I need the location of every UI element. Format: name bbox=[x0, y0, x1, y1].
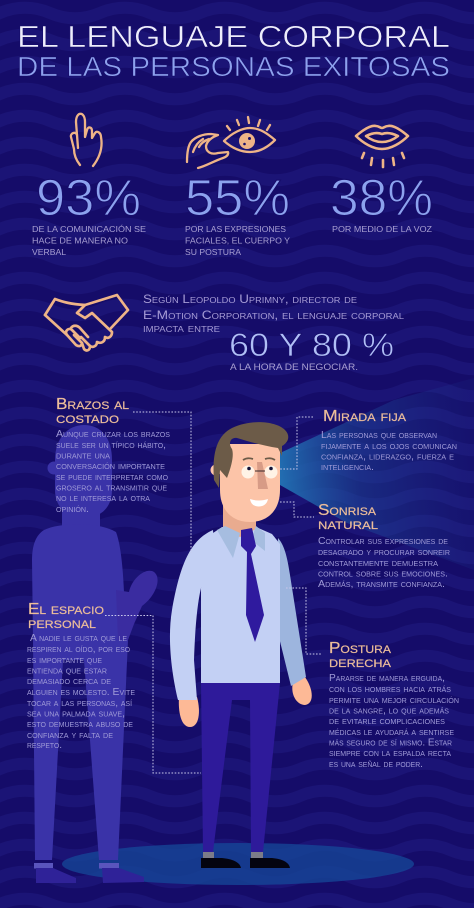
panel: postura derecha bbox=[329, 640, 459, 770]
panel: el espacio personal: confianza y falta de bbox=[27, 730, 113, 741]
panel: postura derecha: médicas le ayudará a sentirse bbox=[329, 727, 454, 738]
panel: postura derecha: de la sangre, lo que además bbox=[329, 706, 449, 716]
panel: sonrisa natural: control sobre sus emociones. bbox=[318, 568, 448, 580]
panel: postura derecha: con los hombres hacia atrás bbox=[329, 684, 451, 695]
ghost figure: wrong posture bbox=[32, 425, 158, 883]
smile bbox=[250, 499, 268, 506]
ear bbox=[210, 464, 222, 476]
left sleeve bbox=[170, 530, 215, 700]
panel: el espacio personal: es importante que bbox=[27, 655, 102, 666]
nose bbox=[257, 462, 268, 489]
icon: pointing hand bbox=[71, 114, 102, 166]
panel: sonrisa natural: Además, transmite confianza. bbox=[318, 579, 445, 590]
socks bbox=[203, 852, 263, 858]
collar bbox=[217, 526, 265, 558]
panel: postura derecha: de evitarle complicaciones bbox=[329, 716, 445, 727]
tie bbox=[241, 528, 264, 642]
panel: mirada fija bbox=[321, 408, 457, 473]
right hand bbox=[292, 677, 312, 705]
panel: postura derecha: siempre con la espalda recta bbox=[329, 748, 451, 759]
panel: brazos al costado: se puede interpretar como bbox=[56, 472, 169, 483]
panel: postura derecha: es una señal de poder. bbox=[329, 759, 423, 770]
gaze light beam bbox=[280, 378, 474, 570]
panel: brazos al costado: no le interesa la otra bbox=[56, 493, 150, 504]
icon: hand and eye bbox=[187, 117, 275, 168]
panel: el espacio personal bbox=[27, 601, 135, 751]
panel: el espacio personal: El espacio bbox=[28, 601, 104, 618]
panel: el espacio personal: alguien es molesto. Evite bbox=[27, 687, 135, 698]
glasses and eyes bbox=[242, 458, 278, 478]
face bbox=[220, 444, 280, 522]
panel: postura derecha: permite una mejor circulación bbox=[329, 695, 459, 706]
stat: 93% bbox=[32, 114, 146, 257]
right sleeve bbox=[276, 538, 306, 686]
panel: sonrisa natural: Controlar sus expresiones de bbox=[318, 536, 448, 547]
stat: 38%: 38% bbox=[330, 169, 433, 226]
stat: 55%: POR LAS EXPRESIONES bbox=[185, 224, 286, 234]
shirt bbox=[201, 527, 280, 683]
quote: negotiation: A LA HORA DE NEGOCIAR. bbox=[230, 362, 358, 372]
icon: handshake bbox=[45, 295, 128, 350]
stat: 55%: SU POSTURA bbox=[185, 247, 241, 257]
panel: sonrisa natural: desagrado y procurar sonreir bbox=[318, 547, 450, 558]
panel: el espacio personal: tocar a las personas, así bbox=[27, 698, 132, 709]
neck bbox=[223, 505, 256, 537]
stat: 93%: HACE DE MANERA NO bbox=[32, 236, 128, 246]
dotted leader lines bbox=[105, 412, 322, 773]
panel: el espacio personal: respeto. bbox=[27, 740, 62, 751]
panel: mirada fija: Las personas que observan bbox=[321, 430, 437, 441]
panel: mirada fija: fijamente a los ojos comunican bbox=[321, 441, 457, 452]
panel: postura derecha: derecha bbox=[329, 654, 392, 671]
legs bbox=[201, 683, 280, 852]
hair bbox=[214, 422, 288, 488]
panel: el espacio personal: esto demuestra abuso de bbox=[27, 719, 133, 730]
left hand bbox=[179, 697, 199, 727]
title bbox=[17, 19, 450, 82]
main figure: confident man bbox=[170, 422, 312, 868]
panel: brazos al costado: durante una bbox=[56, 450, 110, 462]
panel: postura derecha: más seguro de sí mismo. Estar bbox=[329, 738, 452, 748]
stat: 93%: 93% bbox=[36, 169, 141, 226]
panel: brazos al costado: conversación importante bbox=[56, 461, 165, 472]
title: EL LENGUAJE CORPORAL bbox=[17, 19, 450, 54]
panel: el espacio personal: personal bbox=[28, 615, 96, 632]
panel: brazos al costado: Brazos al bbox=[56, 396, 129, 413]
quote: negotiation: Según Leopoldo Uprimny, director de bbox=[143, 293, 357, 306]
panel: sonrisa natural: Sonrisa bbox=[318, 502, 377, 519]
stat: 93%: VERBAL bbox=[32, 247, 66, 257]
stat: 55% bbox=[185, 117, 290, 257]
panel: sonrisa natural bbox=[318, 502, 450, 590]
stat: 93%: DE LA COMUNICACIÓN SE bbox=[32, 224, 146, 234]
title: DE LAS PERSONAS EXITOSAS bbox=[17, 51, 450, 82]
panel: el espacio personal: demasiado cerca de bbox=[27, 676, 111, 687]
panel: el espacio personal: respiren al oído, por eso bbox=[27, 644, 131, 655]
panel: el espacio personal: sea una palmada suave, bbox=[27, 708, 125, 720]
quote: negotiation: 60 Y 80 % bbox=[229, 327, 394, 363]
quote: negotiation: E-Motion Corporation, el lenguaje corporal bbox=[143, 309, 405, 322]
panel: sonrisa natural: natural bbox=[318, 516, 378, 533]
panel: brazos al costado: suele ser un típico hábito, bbox=[56, 440, 166, 451]
panel: brazos al costado bbox=[56, 396, 170, 515]
panel: postura derecha: Pararse de manera erguida, bbox=[329, 673, 445, 684]
panel: mirada fija: Mirada fija bbox=[323, 408, 407, 425]
quote: negotiation: impacta entre bbox=[143, 322, 220, 335]
panel: mirada fija: confianza, liderazgo, fuerza e bbox=[321, 452, 454, 462]
panel: brazos al costado: costado bbox=[56, 410, 120, 427]
panel: brazos al costado: opinión. bbox=[56, 504, 89, 515]
quote: negotiation bbox=[45, 293, 405, 372]
shoes bbox=[201, 858, 290, 868]
icon: lips bbox=[356, 126, 408, 167]
panel: el espacio personal: A nadie le gusta que le bbox=[30, 633, 127, 644]
panel: postura derecha: Postura bbox=[329, 640, 392, 657]
stat: 38%: POR MEDIO DE LA VOZ bbox=[332, 224, 432, 234]
stat: 38% bbox=[330, 126, 433, 234]
panel: mirada fija: inteligencia. bbox=[321, 462, 374, 473]
panel: brazos al costado: Aunque cruzar los brazos bbox=[56, 429, 170, 440]
stat: 55%: 55% bbox=[185, 169, 290, 226]
panel: sonrisa natural: constantemente demuestra bbox=[318, 558, 438, 569]
panel: el espacio personal: entienda que estar bbox=[27, 666, 107, 676]
ground shadow bbox=[62, 843, 414, 885]
stat: 55%: FACIALES, EL CUERPO Y bbox=[185, 236, 290, 246]
panel: brazos al costado: grosero al transmitir que bbox=[56, 482, 167, 494]
